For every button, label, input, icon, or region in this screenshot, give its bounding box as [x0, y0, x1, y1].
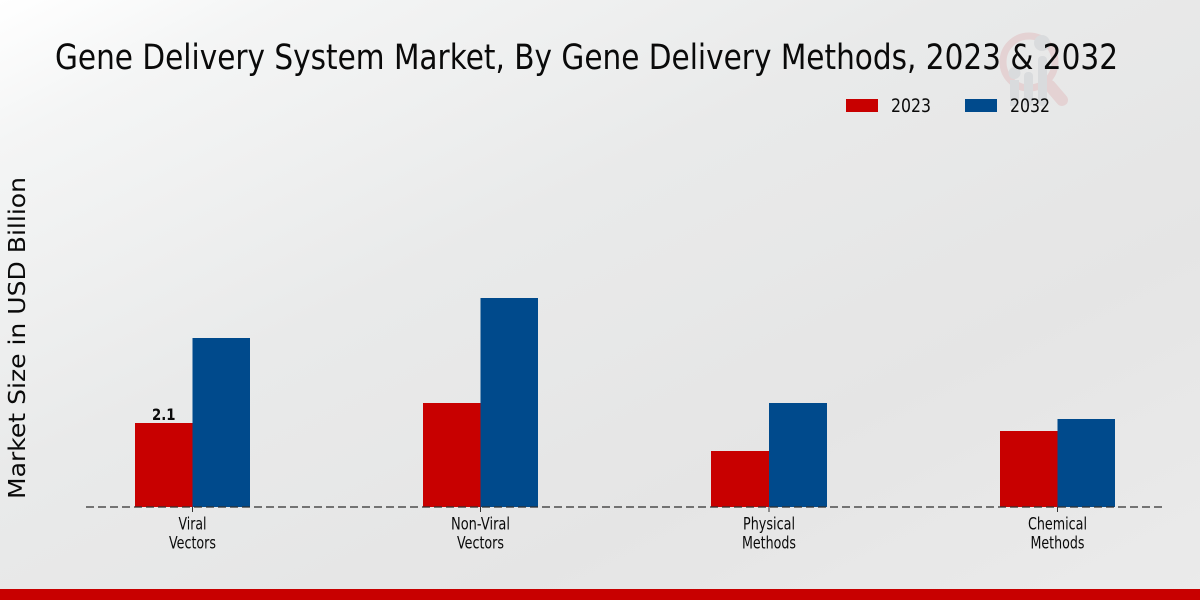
legend item: 2023 — [846, 95, 931, 117]
bar chart — [86, 298, 1164, 512]
x-axis label: Non-Viral Vectors — [451, 514, 510, 552]
group: Physical Methods — [711, 403, 827, 507]
group: Viral Vectors — [135, 338, 250, 507]
x-axis label: Physical Methods — [742, 514, 796, 552]
x-axis label: Physical Methods: Methods — [742, 534, 796, 552]
legend — [846, 95, 1050, 117]
x-axis label: Chemical Methods: Methods — [1030, 534, 1084, 552]
x-axis label: Viral Vectors: Viral — [178, 514, 206, 534]
x-axis label: Non-Viral Vectors: Non-Viral — [451, 514, 510, 534]
y-axis label: Market Size in USD Billion — [3, 177, 31, 499]
x-axis label: Non-Viral Vectors: Vectors — [457, 534, 504, 552]
group: Chemical Methods — [1000, 419, 1115, 507]
watermark logo — [1003, 35, 1062, 106]
x-axis label: Viral Vectors — [169, 514, 216, 552]
x-axis label: Chemical Methods: Chemical — [1028, 514, 1087, 534]
data label: 2.1: 2.1 — [152, 405, 176, 424]
legend item: 2032 — [965, 95, 1050, 117]
baseline — [86, 506, 1164, 508]
legend item: 2032: 2032 — [1010, 95, 1050, 117]
legend item: 2023: 2023 — [891, 95, 931, 117]
x-axis label: Chemical Methods — [1028, 514, 1087, 552]
x-axis label: Physical Methods: Physical — [743, 514, 795, 534]
group: Non-Viral Vectors — [423, 298, 538, 507]
footer bar — [0, 589, 1200, 600]
x-axis label: Viral Vectors: Vectors — [169, 534, 216, 552]
